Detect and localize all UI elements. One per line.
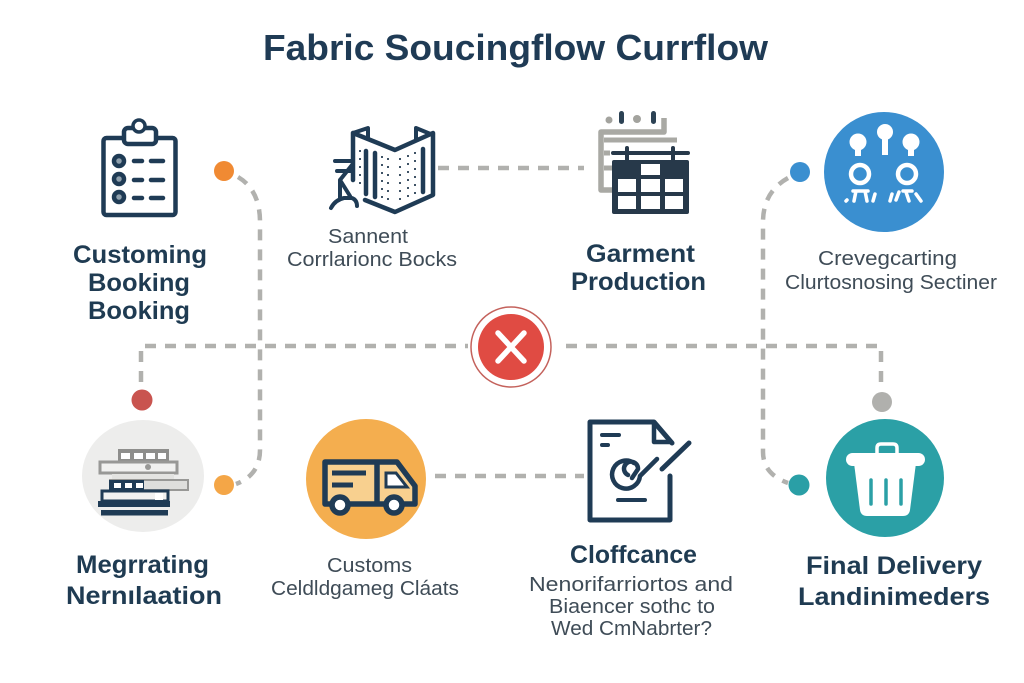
text: customs celdldgameg claats: Celdldgameg Cláats xyxy=(271,578,459,600)
heading: final delivery landinimeders xyxy=(798,552,990,611)
heading: garment production: Production xyxy=(571,268,706,296)
panel: garment production xyxy=(571,111,706,296)
heading: garment production xyxy=(571,240,706,296)
heading: cloffcance: Cloffcance xyxy=(570,541,697,569)
icon: blue team circle xyxy=(824,112,944,232)
icon: signed document xyxy=(590,422,689,520)
connector: central right branch xyxy=(566,346,881,386)
icon: delivery truck on orange circle xyxy=(306,419,426,539)
node dot: red xyxy=(132,390,152,410)
heading: final delivery landinimeders: Final Delivery xyxy=(806,552,982,580)
text: sannent corrlarionc bocks xyxy=(287,226,457,271)
node dot: teal xyxy=(788,474,810,496)
panel: merging nomination xyxy=(66,420,222,610)
heading: garment production: Garment xyxy=(586,240,696,268)
panel: customs clearance xyxy=(271,419,459,600)
connector: central left branch xyxy=(141,346,468,382)
heading: megrrating nernilaation xyxy=(66,551,222,610)
heading: megrrating nernilaation: Nernılaation xyxy=(66,582,222,610)
panel: sample books xyxy=(287,128,457,271)
text: clearance description: Wed CmNabrter? xyxy=(551,618,712,640)
text: sannent corrlarionc bocks: Corrlarionc Bocks xyxy=(287,249,457,271)
icon: bin on teal circle xyxy=(826,419,944,537)
icon: clipboard checklist xyxy=(104,120,176,215)
heading: customing booking xyxy=(73,241,207,325)
node dot: orange bottom xyxy=(214,475,234,495)
text: clearance description: Nenorifarriortos and xyxy=(529,574,733,596)
heading: customing booking: Booking xyxy=(88,297,190,325)
icon: fabric sample book xyxy=(331,128,433,212)
text: crevegcarting clurtosnosing sectiner: Clurtosnosing Sectiner xyxy=(785,272,997,294)
heading: customing booking: Customing xyxy=(73,241,207,269)
panel: clearance xyxy=(529,422,733,640)
text: clearance description: Biaencer sothc to xyxy=(549,596,715,618)
central error icon xyxy=(471,307,551,387)
connector: sample to garment production xyxy=(438,166,584,170)
panel: final delivery xyxy=(798,419,990,611)
heading: customing booking: Booking xyxy=(88,269,190,297)
text: crevegcarting clurtosnosing sectiner: Crevegcarting xyxy=(818,248,957,270)
node dot: blue xyxy=(790,162,810,182)
title: Fabric Soucingflow Currflow xyxy=(263,27,769,68)
text: sannent corrlarionc bocks: Sannent xyxy=(328,226,408,248)
heading: final delivery landinimeders: Landinimeders xyxy=(798,583,990,611)
connector: customs to clearance xyxy=(435,474,584,478)
text: customs celdldgameg claats xyxy=(271,555,459,600)
heading: megrrating nernilaation: Megrrating xyxy=(76,551,209,579)
connector: sourcing to final delivery xyxy=(763,178,788,483)
text: clearance description xyxy=(529,574,733,640)
text: crevegcarting clurtosnosing sectiner xyxy=(785,248,997,294)
icon: stacked fabric rolls xyxy=(82,420,204,532)
panel: customing booking xyxy=(73,120,207,325)
icon: production calendar xyxy=(601,111,689,214)
text: customs celdldgameg claats: Customs xyxy=(327,555,412,577)
node dot: grey xyxy=(872,392,892,412)
node dot: orange top xyxy=(214,161,234,181)
panel: sourcing section xyxy=(785,112,997,294)
connector: booking to merging xyxy=(236,177,260,484)
